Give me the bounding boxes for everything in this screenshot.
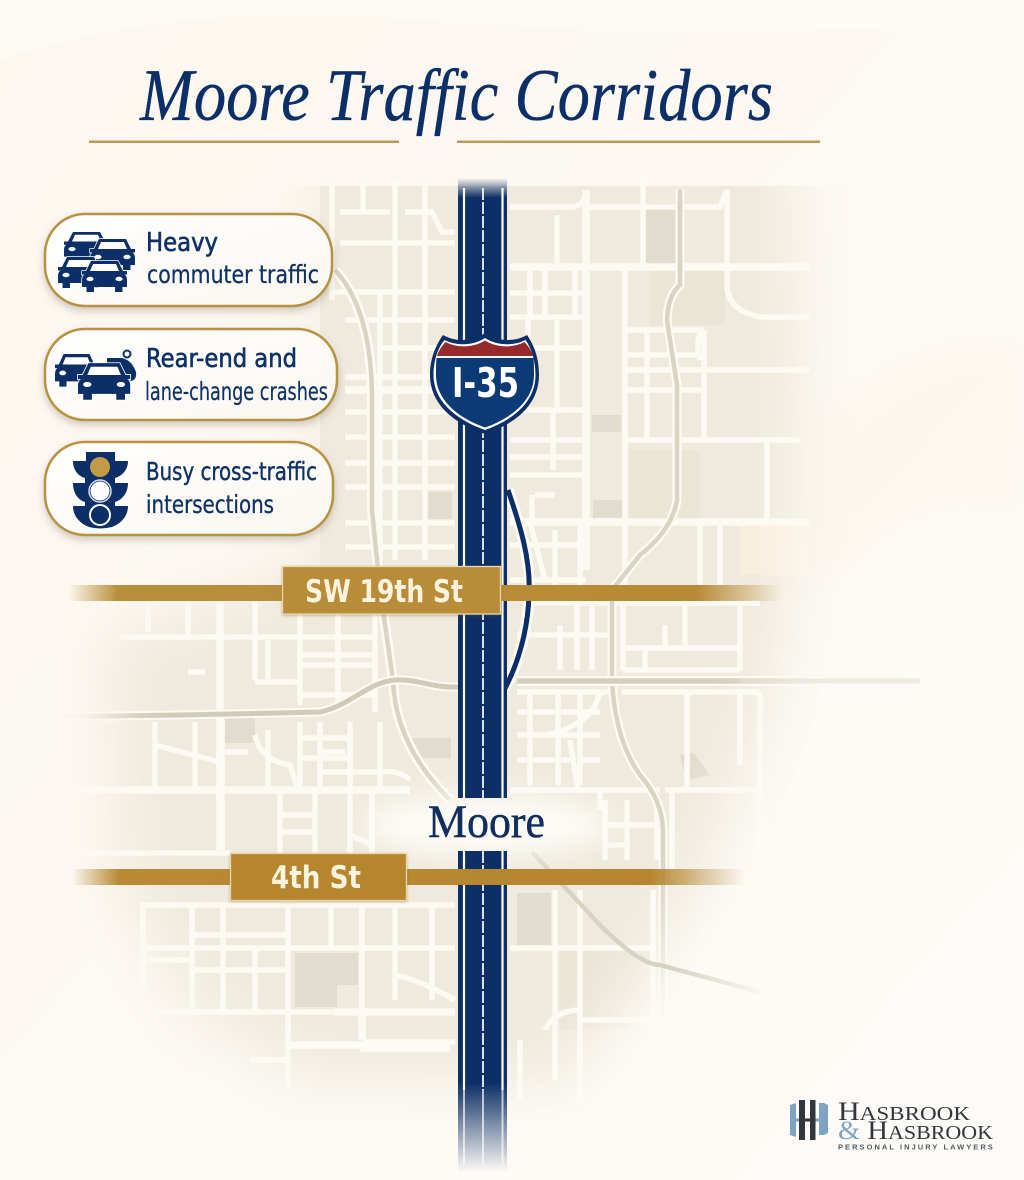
- logo: Hasbrook & Hasbrook: [790, 1097, 995, 1152]
- Moore label glow: [361, 795, 611, 855]
- heading: heavy: Heavy: [146, 228, 218, 258]
- logo tagline: PERSONAL INJURY LAWYERS: [838, 1142, 995, 1152]
- icon: traffic light: [73, 452, 128, 528]
- logo name line 2: & HASBROOK: [838, 1116, 994, 1145]
- panel: busy cross-traffic intersections: [45, 442, 333, 535]
- icon: traffic jam cars: [58, 232, 135, 292]
- icon: crash cars: [55, 350, 136, 400]
- title underline: [89, 140, 820, 143]
- panel: heavy commuter traffic: [45, 214, 332, 306]
- SW 19th St road band: [68, 585, 782, 601]
- heading: rear-end and: Rear-end and: [146, 344, 297, 374]
- minor streets: [60, 180, 810, 1100]
- major road: east-west: [517, 676, 960, 686]
- Interstate 35 highway: [458, 178, 529, 1172]
- panel: rear-end and lane-change crashes: [45, 329, 337, 420]
- label: intersections: intersections: [146, 490, 274, 519]
- logo mark: [790, 1100, 828, 1140]
- label: commuter traffic: commuter traffic: [147, 260, 319, 289]
- major road: diagonal south-east: [532, 852, 760, 992]
- major road: east north-south: [612, 190, 680, 1090]
- I-35 shield: [430, 333, 539, 434]
- label: lane-change crashes: lane-change crashes: [145, 377, 328, 406]
- I-35 shield: I-35: [452, 359, 519, 407]
- Moore place label: Moore: [428, 796, 545, 848]
- city blocks: [106, 186, 808, 1094]
- east-west road fade: [740, 678, 920, 684]
- wide streets: [60, 190, 810, 1048]
- SW 19th St sign: [282, 566, 500, 614]
- 4th St sign: 4th St: [271, 860, 361, 896]
- title: Moore Traffic Corridors: [139, 55, 773, 137]
- major road: west-east connector: [40, 680, 458, 717]
- heading: busy cross-traffic: Busy cross-traffic: [146, 457, 317, 486]
- 4th St sign: [230, 854, 406, 900]
- major road: northwest curve: [335, 270, 450, 800]
- logo name line 1: HASBROOK: [838, 1097, 971, 1126]
- SW 19th St sign: SW 19th St: [305, 574, 463, 610]
- street map: [84, 186, 808, 1094]
- 4th St road band: [72, 869, 745, 885]
